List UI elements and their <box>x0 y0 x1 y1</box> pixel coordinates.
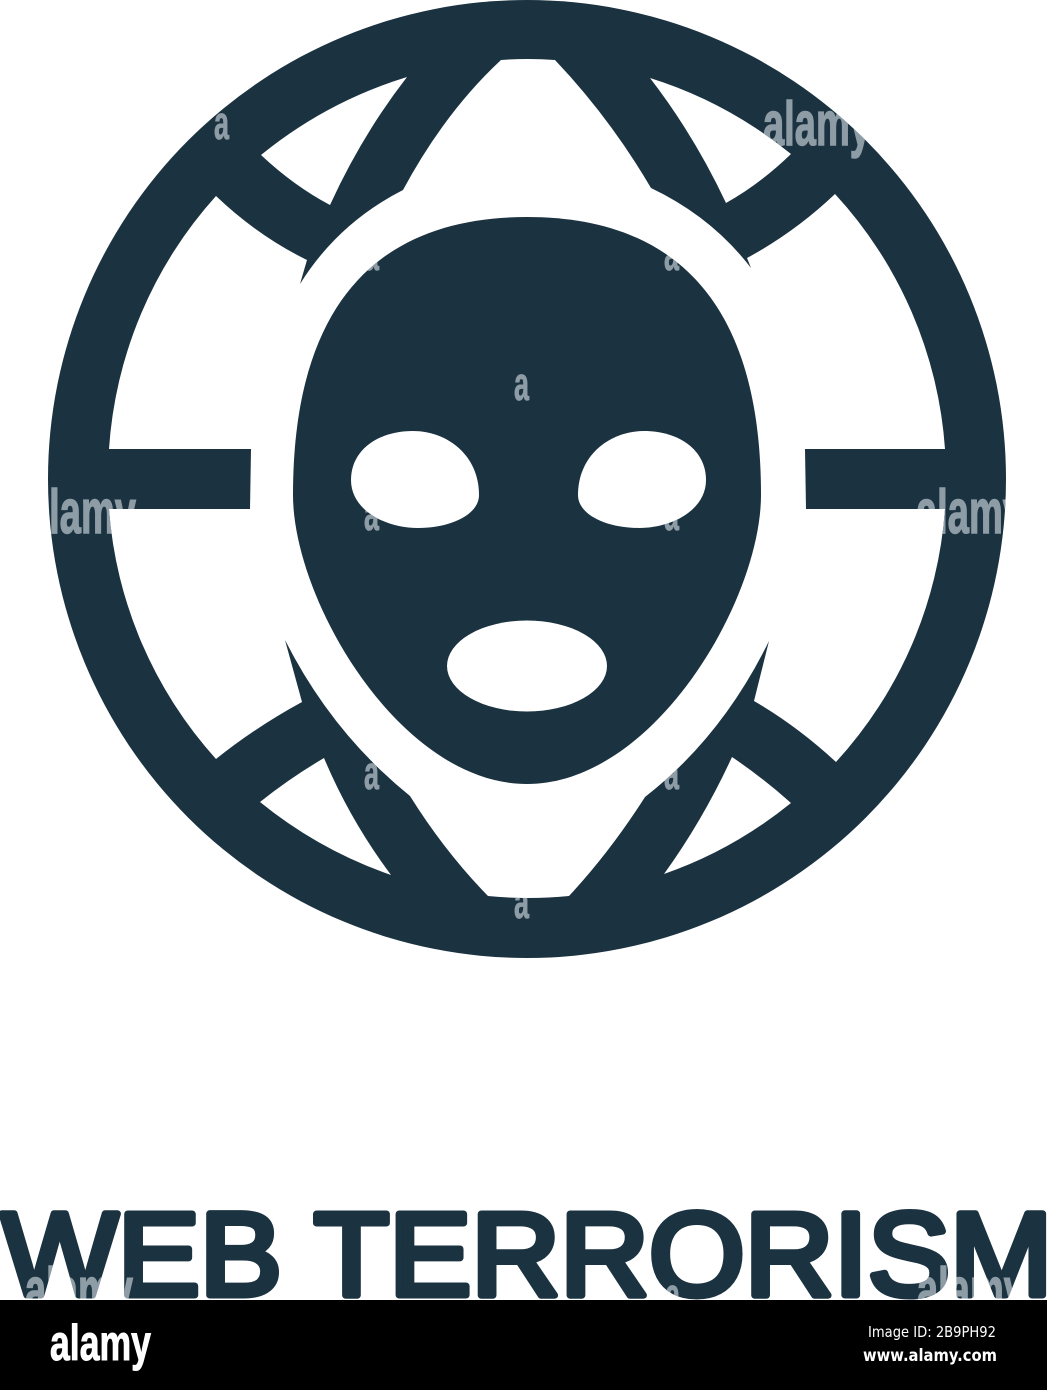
watermarks: a <box>664 746 679 799</box>
watermarks: alamy <box>25 1256 133 1325</box>
title: WEB TERRORISM <box>2 1189 1047 1321</box>
watermarks: a <box>364 746 379 799</box>
watermarks: a <box>214 96 229 149</box>
watermarks: a <box>665 1268 680 1321</box>
watermarks: a <box>664 487 679 540</box>
graticule cell: bottom right <box>664 757 791 874</box>
globe outer disc <box>48 0 1006 958</box>
footer bar <box>0 1300 1047 1390</box>
watermarks: a <box>364 227 379 280</box>
watermarks: alamy <box>28 478 136 547</box>
graticule cell: top left <box>261 77 407 205</box>
globe interior cut-out with meridians and equator bars <box>109 59 945 898</box>
icon: globe with masked face <box>48 0 1006 958</box>
right eye hole <box>578 431 706 528</box>
watermarks: a <box>664 227 679 280</box>
watermarks: alamy <box>763 90 871 159</box>
website: www.alamy.com <box>863 1346 997 1365</box>
graticule cell: bottom left <box>260 758 391 875</box>
image id: Image ID: 2B9PH92 <box>868 1323 996 1341</box>
watermarks: a <box>514 875 529 928</box>
graticule cell: top right <box>650 78 791 203</box>
left eye hole <box>351 431 479 528</box>
mouth hole <box>447 620 607 712</box>
watermarks: a <box>364 487 379 540</box>
masked face <box>293 217 761 784</box>
footer logo: alamy <box>50 1315 151 1371</box>
watermarks: a <box>514 357 529 410</box>
